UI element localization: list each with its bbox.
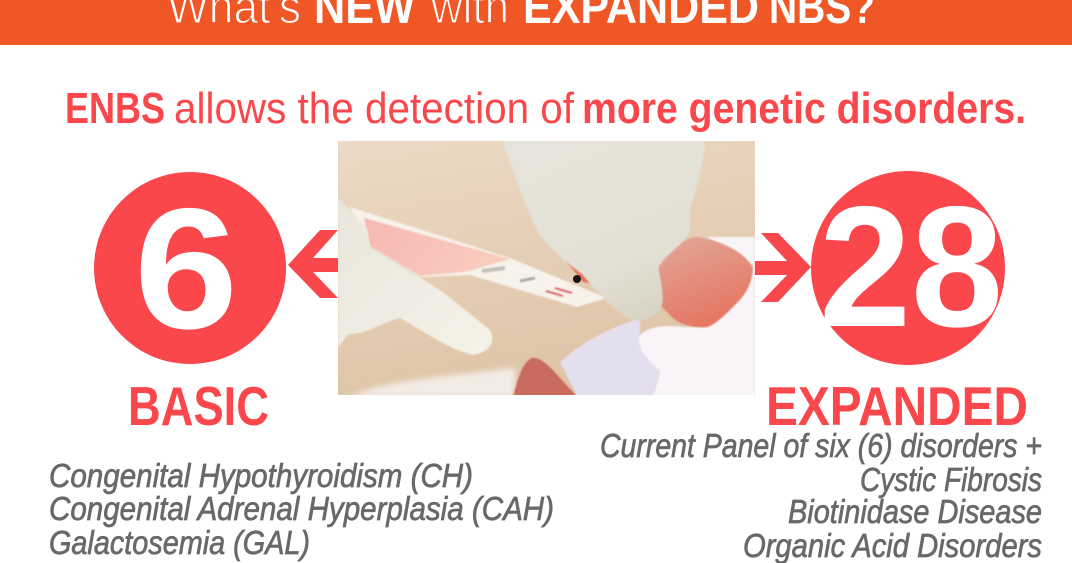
list: basic disorders: [49, 457, 554, 561]
baby heel: [658, 237, 753, 327]
list: basic disorders: Galactosemia (GAL): [49, 524, 310, 561]
heel in glove: [566, 262, 590, 284]
heading: basic: BASIC: [128, 375, 269, 437]
list: expanded disorders: Cystic Fibrosis: [860, 461, 1042, 498]
lilac cloth: [560, 318, 660, 396]
photo: newborn heel-prick blood sampling: [338, 141, 755, 397]
gloved hand, upper: [502, 141, 705, 320]
blurred white blanket: [350, 368, 515, 397]
subtitle: allows the detection of: [174, 84, 575, 133]
subtitle: ENBS: [65, 84, 165, 133]
circle: 6 basic: 6: [134, 173, 238, 365]
header banner: [0, 0, 1072, 45]
list: expanded disorders: Biotinidase Disease: [788, 493, 1042, 530]
title: [167, 0, 875, 33]
subtitle: [65, 84, 1026, 133]
heading: expanded: EXPANDED: [766, 375, 1028, 437]
blood sample card: [350, 207, 607, 307]
list: basic disorders: Congenital Hypothyroidism (CH): [49, 457, 473, 494]
subtitle: more genetic disorders.: [582, 84, 1026, 133]
arrow: left to basic: [288, 230, 338, 298]
list: basic disorders: Congenital Adrenal Hyperplasia (CAH): [49, 490, 554, 527]
circle: 6 basic: [94, 172, 286, 365]
baby foot, lower: [513, 358, 577, 396]
white cloth: [639, 237, 755, 396]
list: expanded disorders: [600, 427, 1042, 563]
arrow: right to expanded: [755, 233, 811, 302]
circle: 28 expanded: 28: [819, 171, 1003, 363]
gloved hand, left: [338, 198, 492, 355]
